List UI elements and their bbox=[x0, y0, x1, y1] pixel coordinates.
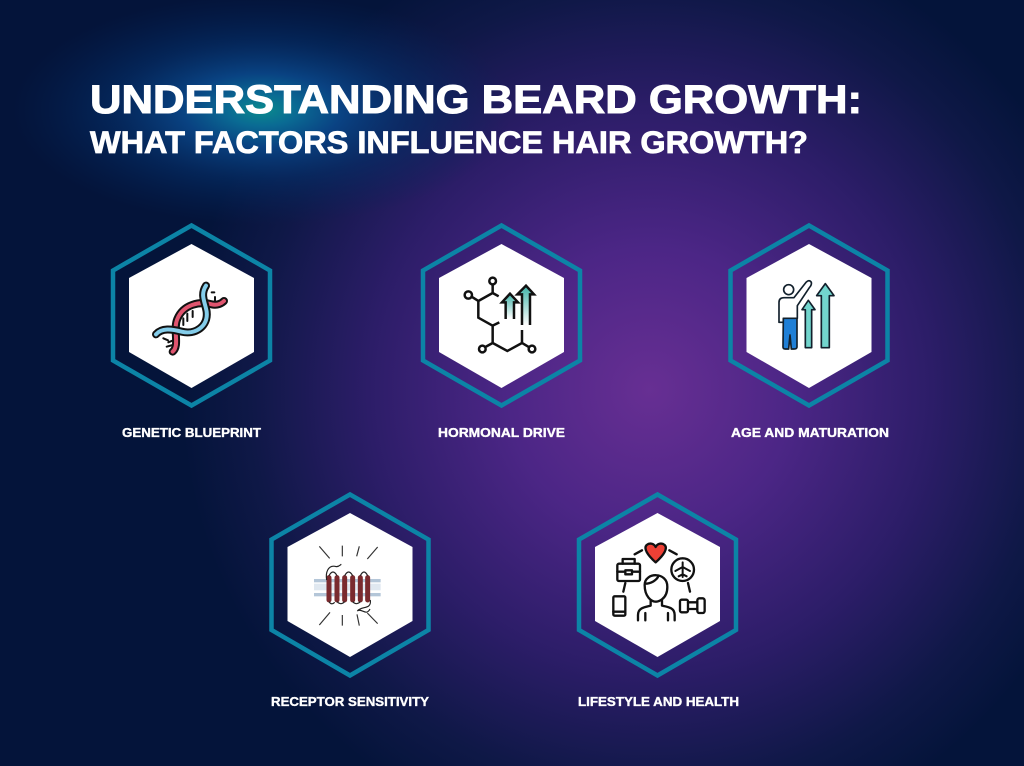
panel: receptor sensitivity bbox=[271, 494, 430, 709]
white hexagon bbox=[595, 513, 720, 657]
white hexagon bbox=[288, 513, 412, 657]
label: HORMONAL DRIVE bbox=[438, 426, 565, 440]
icon: membrane receptor bbox=[314, 546, 381, 626]
hexagon frame bbox=[579, 494, 736, 676]
panel: age and maturation bbox=[730, 226, 889, 440]
white hexagon bbox=[439, 244, 564, 388]
hexagon frame bbox=[272, 494, 428, 676]
title line 1: UNDERSTANDING BEARD GROWTH: bbox=[90, 78, 862, 122]
hexagon frame bbox=[113, 226, 270, 406]
label: RECEPTOR SENSITIVITY bbox=[271, 695, 430, 709]
label: GENETIC BLUEPRINT bbox=[122, 426, 261, 440]
hexagon frame bbox=[730, 226, 888, 406]
title line 2: WHAT FACTORS INFLUENCE HAIR GROWTH? bbox=[90, 124, 808, 160]
white hexagon bbox=[129, 244, 254, 388]
icon: lifestyle bbox=[613, 544, 705, 620]
panel: genetic blueprint bbox=[113, 226, 270, 440]
white hexagon bbox=[746, 244, 872, 388]
label: AGE AND MATURATION bbox=[731, 426, 889, 440]
hexagon frame bbox=[423, 226, 580, 406]
panel: hormonal drive bbox=[423, 226, 580, 440]
title bbox=[90, 78, 862, 160]
icon: dna helix bbox=[156, 286, 224, 352]
panel: lifestyle and health bbox=[578, 494, 739, 709]
icon: molecule with arrows bbox=[465, 278, 535, 352]
label: LIFESTYLE AND HEALTH bbox=[578, 695, 739, 709]
icon: person with rising arrows bbox=[779, 281, 834, 349]
